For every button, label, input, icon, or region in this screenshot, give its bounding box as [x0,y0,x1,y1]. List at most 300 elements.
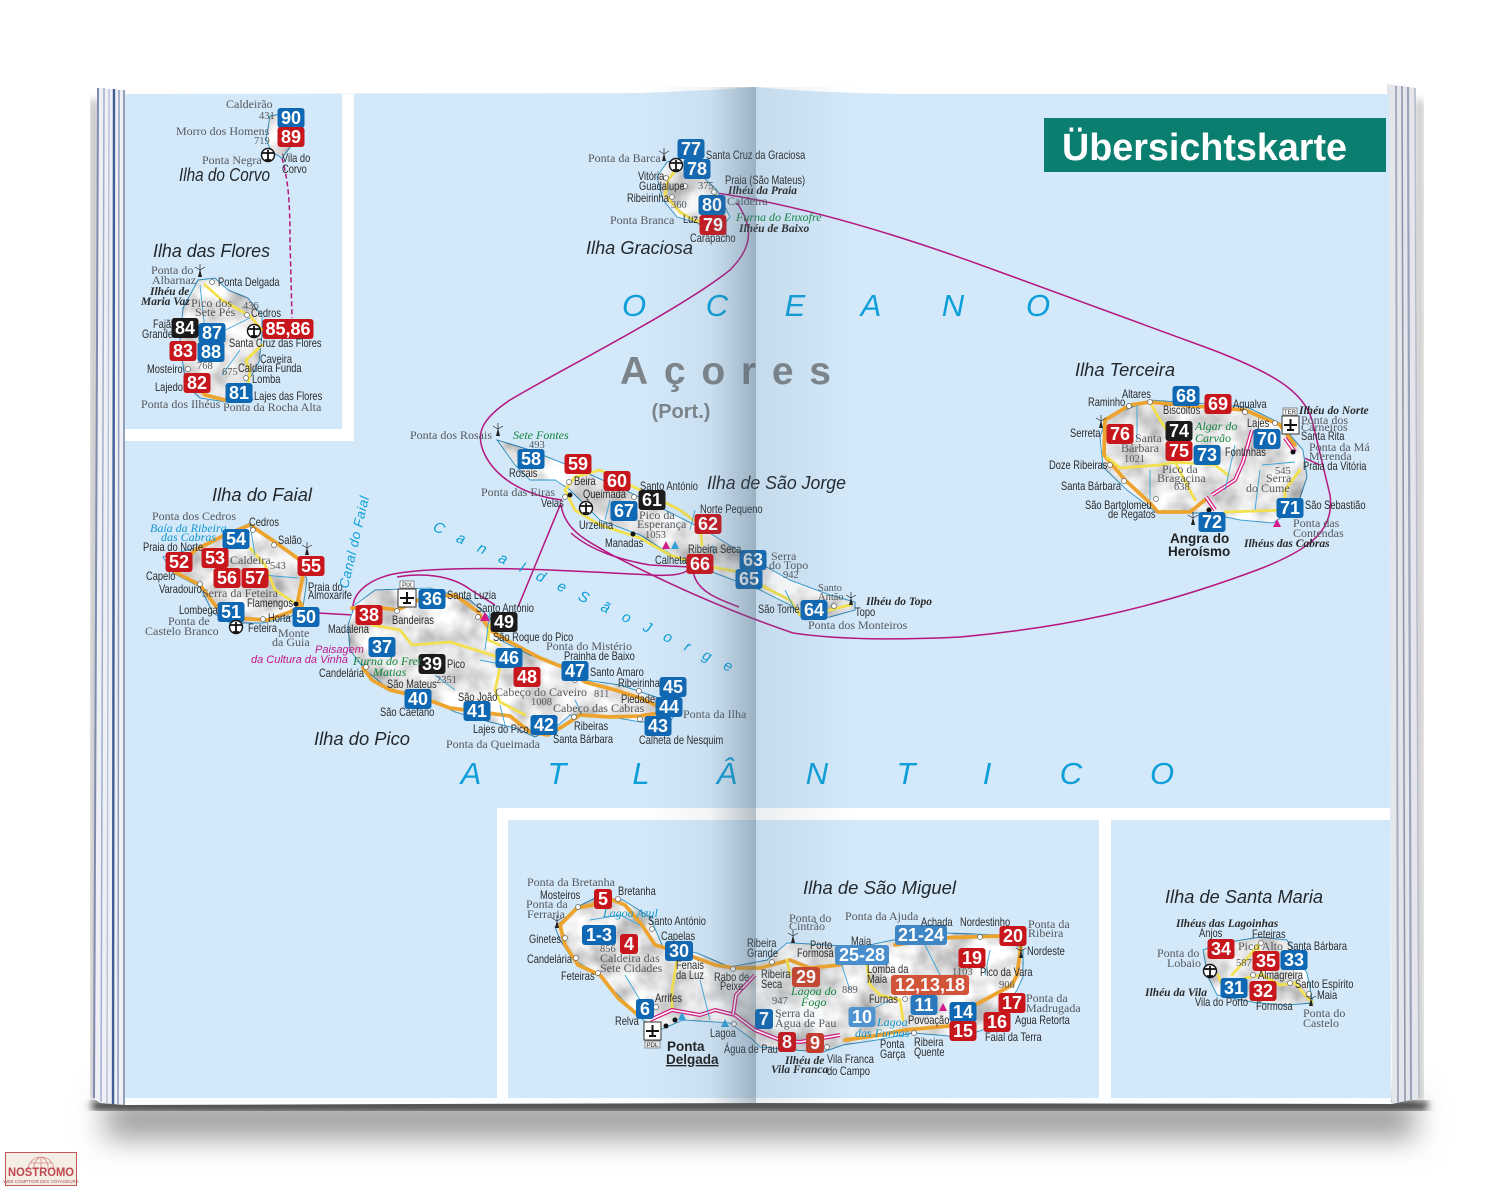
left page edge stack [93,88,125,1105]
São Miguel labels: Ponta da Ajuda [845,909,919,923]
Graciosa route badges: 80 [702,195,722,215]
Terceira airport icon: TER [1284,410,1297,416]
São Miguel labels: Ribeira [747,938,777,950]
São Jorge land [497,440,855,620]
Terceira labels: Biscoitos [1163,405,1200,417]
São Miguel labels: Agua Retorta [1015,1015,1070,1027]
Santa Maria labels: 587 [1236,958,1252,969]
São Miguel labels: Lomba da [867,964,909,976]
Pico airport icon: PIX [402,583,412,589]
Pico labels: Cabeço das Cabras [553,701,645,715]
Corvo airport icon [262,148,274,162]
Graciosa airport icon [670,158,682,172]
Graciosa labels: Ilha Graciosa [586,238,693,258]
São Miguel labels: Quente [914,1047,945,1059]
Corvo land [266,114,291,158]
Terceira labels: Ponta das [1293,516,1340,530]
Faial route badges: 56 [217,568,237,588]
Corvo labels [176,97,310,185]
Graciosa labels: Ilhéu da Praia [727,185,797,197]
Pico labels: Ilha do Pico [314,729,410,749]
Pico route badges [356,589,686,736]
Terceira labels: Bragaçina [1157,471,1206,485]
Pico labels: Matias [372,665,407,679]
logo: Nostromo [3,1152,79,1186]
Pico labels: São Roque do Pico [493,632,573,644]
Graciosa route badges: 79 [703,215,723,235]
Faial land [163,523,307,623]
São Miguel labels: 889 [842,985,858,996]
Flores roads [186,280,262,400]
São Miguel route badges: 19 [962,948,982,968]
São Miguel labels: Arrifes [655,993,682,1005]
São Miguel labels: Delgada [666,1052,719,1067]
Pico labels: Madalena [328,624,369,636]
Terceira labels: Agualva [1233,399,1267,411]
São Miguel labels: Bretanha [618,886,656,898]
inset frame: Corvo and Flores [125,94,354,441]
Terceira land [1100,400,1307,523]
Pico labels: 811 [594,689,609,700]
São Jorge labels: São Tomé [758,604,800,616]
Flores labels: Grande [142,329,173,341]
Pico labels: Cabeço do Caveiro [495,685,587,699]
Terceira labels: de Regatos [1108,509,1156,521]
Graciosa labels: Praia (São Mateus) [725,175,805,187]
Flores labels: Sete Pés [195,305,236,319]
Flores labels: Ponta da Rocha Alta [223,400,322,414]
São Jorge route badges: 64 [804,600,824,620]
island: Faial [143,485,352,649]
São Miguel route badges: 11 [914,995,934,1015]
inset frame: São Miguel and Santa Maria [497,808,1390,1098]
São Jorge route badges: 58 [521,449,541,469]
Terceira labels: Altares [1122,389,1151,401]
Terceira labels: São Bartolomeu [1085,500,1152,512]
island: Terceira [1049,360,1370,559]
São Miguel labels: Povoação [908,1015,950,1027]
Pico route badges: 46 [499,648,519,668]
ocean lettering: Atlântico: O [1150,756,1174,791]
ocean lettering: Atlântico: C [1060,756,1083,791]
Faial route badges: 55 [301,556,321,576]
São Miguel labels: Relva [615,1016,639,1028]
Santa Maria airport icon [1204,964,1216,978]
Faial labels: Ilha do Faial [212,485,313,505]
Flores route badges: 81 [229,383,249,403]
Pico land [348,588,680,737]
Santa Maria labels: Ilhéu da Vila [1144,987,1207,999]
Corvo labels: Caldeirão [226,97,273,111]
island: São Jorge [410,428,932,632]
Faial route badges: 50 [296,607,316,627]
book gutter shading [640,87,856,1103]
São Miguel labels: Vila Franca [827,1054,874,1066]
Pico labels: Ponta da Ilha [683,707,747,721]
São Miguel labels: Cintrão [789,919,825,933]
São Jorge labels: do Topo [769,558,808,572]
São Miguel labels: Maia [867,974,887,986]
Flores airport icon [248,324,260,338]
São Miguel route badges: 9 [810,1033,820,1053]
ocean lettering: Atlântico: L [632,756,650,791]
São Miguel labels: 947 [772,996,788,1007]
Flores labels: Cedros [251,308,281,320]
São Miguel labels: Vila Franca [771,1064,828,1076]
São Miguel labels: Ponta da [1028,917,1070,931]
Faial labels: das Cabras [161,530,216,544]
ocean lettering: Atlântico: T [548,756,569,791]
São Jorge labels: Ilha de São Jorge [707,473,846,493]
São Miguel route badges: 5 [598,889,608,909]
São Miguel land [555,897,1023,1052]
São Jorge labels: Velas [541,498,564,510]
Terceira labels: Carvão [1195,431,1231,445]
Pico route badges: 42 [534,715,554,735]
logo: Nostromo: NOSTROMO [8,1165,74,1179]
Faial labels: Varadouro [159,584,202,596]
São Jorge labels: Santo [818,583,842,594]
Terceira labels: Algar do [1194,419,1237,433]
São Jorge roads [562,470,850,615]
Graciosa labels: Vitória [638,171,664,183]
Flores route badges: 88 [201,342,221,362]
São Miguel airport icon: PDL [647,1043,659,1049]
São Miguel labels: Ribeira [761,969,791,981]
Flores route badges: 84 [175,318,195,338]
São Jorge labels: Ponta dos Monteiros [808,618,908,632]
São Miguel roads [560,896,1021,1050]
São Jorge route badges: 65 [739,569,759,589]
Pico route badges: 39 [422,654,442,674]
São Miguel route badges: 12,13,18 [895,975,965,995]
Corvo route badges [278,108,304,147]
channel label: Canal do Faial: Canal do Faial [336,494,372,590]
São Miguel labels: Seca [761,979,782,991]
Corvo labels: 431 [259,111,275,122]
São Miguel labels: Candelária [527,954,572,966]
Faial route badges: 54 [226,529,246,549]
São Miguel labels: Fogo [800,995,826,1009]
São Miguel route badges: 8 [782,1032,792,1052]
Faial labels: Capelo [146,571,176,583]
Terceira route badges: 69 [1208,394,1228,414]
São Jorge labels: Antão [818,592,844,603]
Terceira labels: 1021 [1124,454,1145,465]
São Miguel labels: Lagoa Azul [602,906,658,920]
Santa Maria labels: Santo Espírito [1295,979,1354,991]
Santa Maria labels: Feteiras [1252,929,1286,941]
São Miguel route badges: 15 [953,1021,973,1041]
São Miguel route badges: 16 [987,1012,1007,1032]
Pico labels: Ribeirinha [618,678,660,690]
Pico labels: da Cultura da Vinha [251,654,348,666]
São Miguel route badges: 20 [1003,926,1023,946]
São Miguel labels: Maia [851,936,871,948]
Pico labels: Pico [447,659,465,671]
region name: Açores: Açores [620,350,831,393]
São Miguel labels: Madrugada [1026,1001,1081,1015]
Pico route badges: 41 [467,701,487,721]
ocean lettering: Oceano: N [942,288,965,323]
São Miguel labels: Ribeira [1028,926,1064,940]
Faial labels: Ponta dos Cedros [152,509,236,523]
Flores labels: Albarnaz [152,273,196,287]
São Jorge route badges: 66 [690,554,710,574]
Santa Maria route badges: 34 [1211,939,1231,959]
Terceira labels: Doze Ribeiras [1049,460,1107,472]
Pico labels: Prainha de Baixo [564,651,635,663]
Corvo labels: Ilha do Corvo [179,165,270,185]
São Miguel labels: Ponta do [789,911,831,925]
Faial labels: Cedros [249,517,279,529]
São Miguel route badges: 10 [852,1007,872,1027]
Terceira route badges: 74 [1169,421,1189,441]
Faial labels: Monte [278,626,309,640]
São Jorge labels: Topo [855,607,875,619]
Pico labels: Calheta de Nesquim [639,735,724,747]
Graciosa labels: 360 [671,200,687,211]
Faial route badges: 57 [245,568,265,588]
São Miguel route badges: 14 [953,1002,973,1022]
Graciosa labels: Carapacho [690,233,736,245]
Santa Maria labels: Santa Bárbara [1287,941,1347,953]
Flores labels: Ilhéu de [149,286,189,298]
Faial labels: Baía da Ribeira [150,521,227,535]
São Miguel labels: Mosteiros [540,890,580,902]
São Miguel labels: 906 [999,980,1015,991]
São Miguel route badges: 7 [759,1009,769,1029]
island: Corvo [176,97,310,185]
São Miguel labels: Grande [747,948,778,960]
Flores labels: Lajedo [155,382,183,394]
São Miguel labels: Ponta da [526,897,568,911]
Pico labels: São Caetano [380,707,434,719]
São Miguel route badges: 17 [1002,993,1022,1013]
Corvo labels: Corvo [282,164,307,176]
São Miguel labels: das Furnas [855,1026,910,1040]
Graciosa labels: Caldeira [727,194,768,208]
Faial labels: Lombega [179,605,218,617]
Terceira route badges [1106,386,1304,532]
São Jorge labels: Calheta [655,555,687,567]
Graciosa labels [586,150,822,258]
Flores route badges: 87 [202,323,222,343]
Pico route badges: 38 [359,605,379,625]
Santa Maria roads [1218,940,1312,1002]
São Jorge route badges: 59 [568,454,588,474]
ocean lettering: Atlântico: A [459,756,481,791]
Pico labels: Ponta da Queimada [446,737,541,751]
Graciosa labels: Ilhéu de Baixo [738,223,810,235]
Terceira airport icon [1282,408,1299,434]
Santa Maria labels: Vila do Porto [1195,997,1248,1009]
Terceira labels: Raminho [1088,397,1125,409]
Pico labels [251,590,747,751]
ocean lettering: Atlântico: I [983,756,992,791]
Terceira route badges: 73 [1197,445,1217,465]
São Miguel labels: Água de Pau [724,1042,778,1056]
São Miguel labels: Ponta [880,1039,904,1051]
Santa Maria labels: Ponta do [1157,946,1199,960]
Faial route badges [166,529,324,627]
São Jorge labels: Ilhéu do Topo [865,596,932,608]
Terceira labels: Praia da Vitória [1303,461,1367,473]
São Jorge route badges: 62 [698,514,718,534]
São Miguel route badges: 1-3 [586,925,612,945]
Santa Maria labels: Almagreira [1258,970,1303,982]
Faial labels: Flamengos [247,598,293,610]
São Jorge labels: Esperança [637,517,687,531]
Pico labels: Furna do Frei [352,654,421,668]
São Miguel labels: Rabo de [714,972,749,984]
São Miguel labels: Serra da [775,1006,815,1020]
São Jorge labels: Ribeira Seca [688,544,741,556]
São Miguel labels: Caldeira das [600,951,660,965]
Pico route badges: 44 [659,697,679,717]
Terceira labels: Merenda [1309,449,1352,463]
Pico labels: Ponta do Mistério [546,639,632,653]
Pico route badges: 40 [408,689,428,709]
island: Graciosa [586,139,822,258]
São Miguel route badges: 4 [624,934,634,954]
Santa Maria route badges: 31 [1224,978,1244,998]
Faial labels [143,485,352,649]
Santa Maria labels: Ilha de Santa Maria [1165,887,1323,907]
São Miguel labels [526,875,1081,1078]
São Miguel labels: Ferraria [527,907,566,921]
São Miguel labels: Ilha de São Miguel [803,878,957,898]
ocean lettering: Oceano: O [1026,288,1050,323]
São Miguel labels: Achada [921,917,953,929]
Flores labels: Santa Cruz das Flores [229,338,322,350]
Santa Maria route badges [1208,939,1308,1001]
Faial labels: Salão [278,535,302,547]
title banner [1044,118,1386,172]
Pico labels: São Mateus [387,679,437,691]
São Miguel labels: Água de Pau [775,1016,836,1030]
Pico airport icon [398,581,416,607]
São Miguel route badges: 29 [796,967,816,987]
ocean lettering: Oceano: A [859,288,881,323]
Pico labels: Piedade [621,694,655,706]
Flores labels: Fajã [153,319,171,331]
Corvo labels: Vila do [282,153,310,165]
Santa Maria labels: Formosa [1256,1001,1293,1013]
Santa Maria route badges: 33 [1284,950,1304,970]
São Miguel route badges: 30 [669,941,689,961]
Santa Maria labels: Maia [1317,990,1337,1002]
Faial labels: Almoxarife [308,590,352,602]
Terceira labels: do Cume [1246,481,1290,495]
Pico labels: Santa Bárbara [553,734,613,746]
Graciosa land [657,158,730,233]
São Miguel labels: da Luz [676,970,704,982]
Terceira labels: São Sebastião [1305,500,1366,512]
São Jorge route badges: 60 [607,471,627,491]
Graciosa labels: 375 [698,181,714,192]
ocean lettering: Oceano: C [706,288,729,323]
São Miguel labels: Ponta da [1026,991,1068,1005]
Pico labels: Bandeiras [392,615,434,627]
title banner: Übersichtskarte [1062,126,1347,169]
São Miguel labels: Lagoa [710,1028,736,1040]
region name: Açores [620,350,831,423]
Terceira labels: Ilha Terceira [1075,360,1175,380]
São Miguel labels: Formosa [797,948,834,960]
Pico route badges: 49 [494,612,514,632]
right page edge stack [1387,84,1420,1104]
São Jorge route badges: 63 [743,550,763,570]
Terceira labels: Pico da [1162,462,1198,476]
Faial labels: Caldeira [230,553,271,567]
São Miguel labels: Ilhéu de [784,1055,824,1067]
Santa Maria labels: Ponta do [1303,1006,1345,1020]
São Miguel labels: Lagoa [876,1015,908,1029]
São Jorge labels [410,428,932,632]
Faial labels: Serra da Feteira [202,586,279,600]
São Miguel labels: Sete Cidades [600,961,663,975]
São Jorge labels: Santo António [640,481,698,493]
Flores labels: Mosteiro [147,364,183,376]
lighthouse icons [195,148,1316,1006]
Terceira route badges: 70 [1257,429,1277,449]
Corvo labels: Morro dos Homens [176,124,270,138]
ferry routes [282,158,1331,639]
Graciosa labels: Luz [683,214,698,226]
Pico labels: Candelária [319,668,364,680]
map sea background [125,87,1391,1098]
island: Santa Maria [1144,887,1354,1030]
Santa Maria labels: Lobaio [1167,956,1201,970]
Pico labels: 1008 [531,697,552,708]
Faial labels: da Guia [272,635,310,649]
São Jorge labels: Serra [771,549,797,563]
Graciosa labels: Ponta da Barca [588,151,661,165]
Pico route badges: 48 [517,667,537,687]
Flores route badges: 85,86 [265,319,311,339]
Flores labels: 675 [222,367,238,378]
São Miguel airport icon [644,1022,661,1049]
São Jorge labels: Queimada [583,489,626,501]
island: Flores [140,241,322,414]
Faial airport icon [230,620,242,634]
São Jorge labels: 942 [783,570,799,581]
São Miguel labels: Furnas [869,994,898,1006]
Graciosa labels: Ponta Branca [610,213,675,227]
São Miguel route badges [582,889,1026,1053]
Pico route badges: 43 [648,716,668,736]
São Miguel route badges: 6 [640,999,650,1019]
Flores route badges: 83 [173,341,193,361]
Graciosa route badges: 78 [687,159,707,179]
Pico roads [352,595,665,735]
island: Pico [251,581,747,751]
Graciosa route badges [678,139,726,235]
Terceira labels: Ilhéus das Cabras [1243,538,1330,550]
Flores labels: Caveira [260,354,292,366]
Santa Maria land [1203,937,1313,1005]
São Miguel labels: Fenais [676,960,704,972]
Pico route badges: 36 [422,589,442,609]
Flores land [180,278,262,402]
São Miguel route badges: 21-24 [898,925,944,945]
Flores labels: Lomba [252,374,281,386]
Terceira labels: Fontinhas [1225,447,1266,459]
Santa Maria labels: Pico Alto [1238,939,1283,953]
Flores route badges: 82 [187,373,207,393]
Terceira labels: Ponta da Má [1309,440,1370,454]
